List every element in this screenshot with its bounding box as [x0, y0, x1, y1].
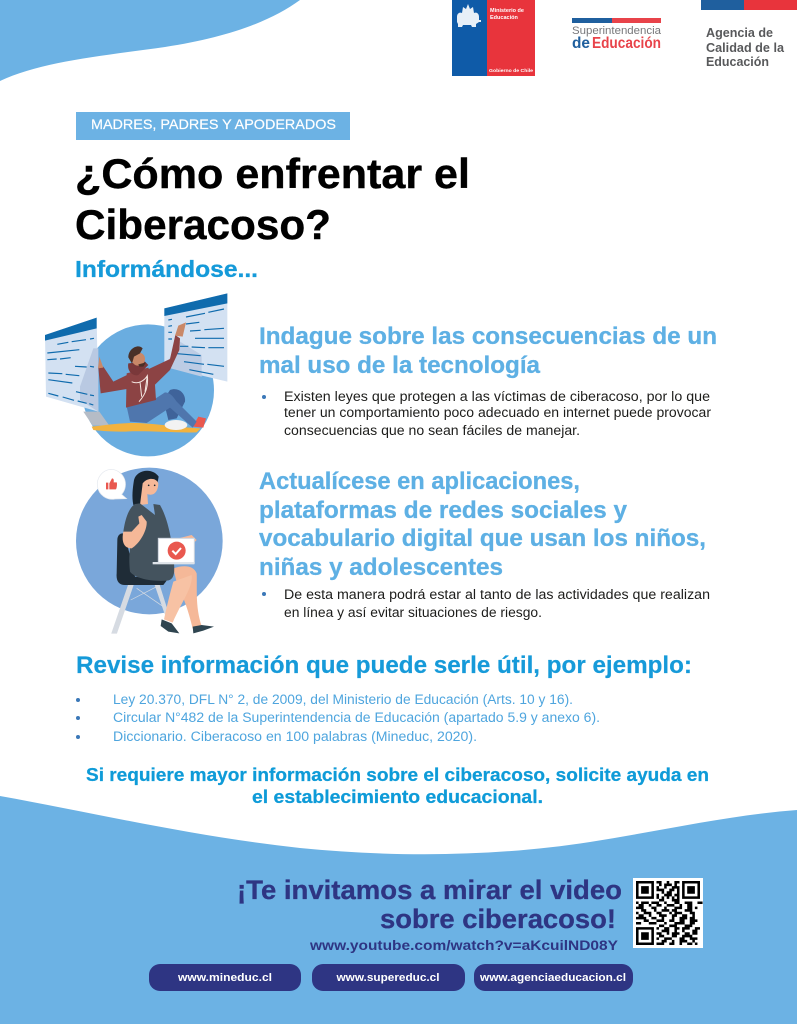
link button: agenciaeducacion: www.agenciaeducacion.cl: [479, 972, 626, 984]
logo: Superintendencia de Educación: Superintendencia: [572, 25, 662, 37]
bullet text: actividades: [262, 587, 710, 620]
title: ¿Cómo enfrentar el: [75, 150, 470, 197]
bullet text: leyes: [262, 389, 712, 438]
logo: Ministerio de Educación: Gobierno de Chile: [489, 68, 533, 74]
logo: Ministerio de Educación: Ministerio de: [490, 8, 524, 14]
logo: Ministerio de Educación: [452, 0, 535, 76]
resource list: Diccionario. Ciberacoso en 100 palabras (Mineduc, 2020).: [113, 729, 477, 744]
help callout: Si requiere mayor información sobre el ciberacoso, solicite ayuda en: [86, 765, 709, 785]
audience banner: [76, 112, 350, 140]
heading: consecuencias: mal uso de la tecnología: [259, 352, 541, 379]
video invitation: sobre ciberacoso!: [380, 904, 616, 934]
logo: Ministerio de Educación: Educación: [490, 15, 518, 21]
heading: aplicaciones: Actualícese en aplicaciones,: [259, 468, 580, 495]
logo: Agencia de Calidad de la Educación: Calidad de la: [706, 41, 785, 55]
resource list: Ley 20.370, DFL N° 2, de 2009, del Ministerio de Educación (Arts. 10 y 16).: [113, 692, 573, 707]
resource list: [76, 692, 600, 744]
heading: aplicaciones: niñas y adolescentes: [259, 554, 503, 581]
heading: consecuencias: [259, 323, 717, 379]
link button: agenciaeducacion: [474, 964, 633, 991]
legs: [161, 566, 214, 633]
bullet text: actividades: De esta manera podrá estar al tanto de las actividades que realizan: [284, 587, 710, 602]
help callout: [86, 765, 709, 807]
top-left wave: [0, 0, 300, 81]
link button: supereduc: [312, 964, 465, 991]
bottom wave panel: [0, 796, 797, 1024]
subtitle: Informándose...: [75, 256, 258, 282]
title: [75, 150, 470, 248]
bullet text: leyes: consecuencias que no sean fáciles de manejar.: [284, 423, 580, 438]
heading: aplicaciones: vocabulario digital que usan los niños,: [259, 525, 706, 552]
illustration: person with browser windows: [45, 293, 227, 456]
title: Ciberacoso?: [75, 201, 331, 248]
resource list: Circular N°482 de la Superintendencia de Educación (apartado 5.9 y anexo 6).: [113, 710, 600, 725]
video invitation: ¡Te invitamos a mirar el video: [237, 875, 622, 905]
logo: Agencia de Calidad de la Educación: [701, 0, 797, 69]
bullet text: actividades: en línea y así evitar situaciones de riesgo.: [284, 605, 542, 620]
laptop: [153, 535, 197, 564]
person: [98, 322, 206, 430]
video invitation: [237, 875, 622, 953]
link button: mineduc: www.mineduc.cl: [177, 972, 272, 984]
speech bubble: [97, 469, 127, 499]
browser window left: [45, 318, 98, 412]
link button: mineduc: [149, 964, 301, 991]
logo: Superintendencia de Educación: de: [572, 35, 590, 52]
heading: aplicaciones: plataformas de redes sociales y: [259, 497, 628, 524]
heading: consecuencias: Indague sobre las consecuencias de un: [259, 323, 717, 350]
illustration: woman with laptop: [76, 468, 223, 633]
logo: Superintendencia de Educación: Educación: [592, 35, 661, 52]
heading: información útil: Revise información que puede serle útil, por ejemplo:: [76, 652, 692, 679]
link button: supereduc: www.supereduc.cl: [335, 972, 440, 984]
logo: Superintendencia de Educación: [572, 18, 662, 52]
logo: Agencia de Calidad de la Educación: Agencia de: [706, 26, 773, 40]
QR code: [633, 878, 703, 948]
browser window right: [164, 293, 227, 382]
bullet text: leyes: tener un comportamiento poco adecuado en internet puede provocar: [284, 405, 712, 420]
bullet text: leyes: Existen leyes que protegen a las víctimas de ciberacoso, por lo que: [284, 389, 710, 404]
video invitation: www.youtube.com/watch?v=aKcuilND08Y: [309, 937, 619, 953]
help callout: el establecimiento educacional.: [252, 787, 543, 807]
audience banner: MADRES, PADRES Y APODERADOS: [91, 116, 336, 132]
logo: Agencia de Calidad de la Educación: Educación: [706, 55, 769, 69]
heading: aplicaciones: [259, 468, 706, 581]
